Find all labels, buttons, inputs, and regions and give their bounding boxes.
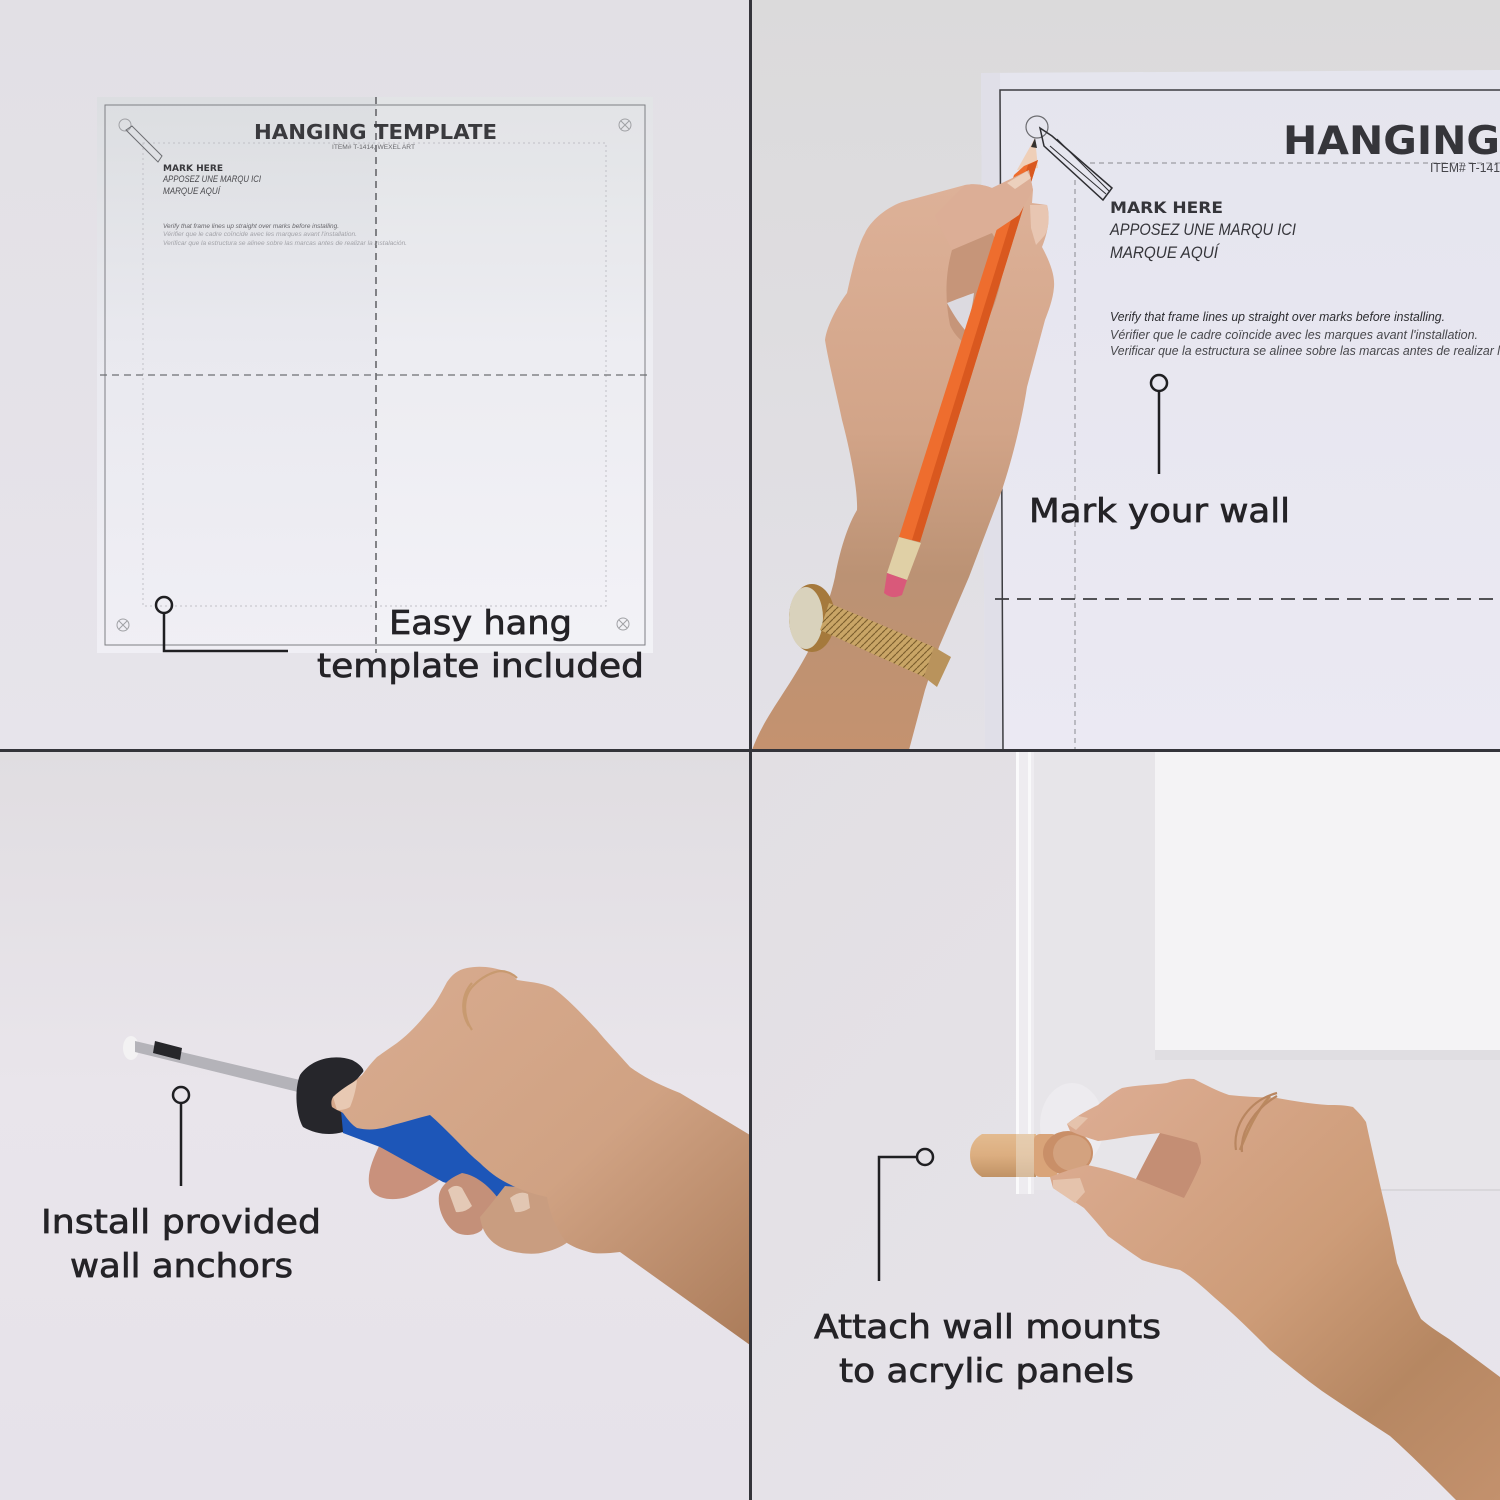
leader line: mounts	[879, 1157, 917, 1281]
template sheet	[97, 97, 653, 653]
white art print	[1155, 752, 1500, 1050]
template sheet: MARQUE AQUÍ	[163, 186, 221, 196]
panel: attach wall mounts	[750, 750, 1500, 1500]
panel: mark your wall	[750, 0, 1500, 750]
hand holding pencil	[752, 170, 1054, 750]
hand with screwdriver	[331, 967, 750, 1345]
caption: easy hang template included	[317, 603, 644, 685]
template sheet: ITEM# T-1414, WEXEL ART	[332, 144, 415, 151]
leader line: template	[164, 613, 288, 651]
leader line: mark	[1158, 391, 1160, 474]
leader dot: anchors	[173, 1087, 189, 1103]
leader dot: template	[156, 597, 172, 613]
caption: attach wall mounts to acrylic panels: to acrylic panels	[839, 1351, 1134, 1390]
suction disc	[1040, 1083, 1104, 1167]
screwdriver	[135, 1041, 530, 1197]
leader dot: mounts	[917, 1149, 933, 1165]
caption: mark your wall: Mark your wall	[1029, 491, 1290, 530]
acrylic panel	[1016, 750, 1500, 1194]
wall anchor	[123, 1036, 139, 1060]
rings	[463, 971, 517, 1030]
caption: install provided wall anchors: Install provided	[41, 1202, 321, 1241]
template sheet: MARK HERE	[163, 164, 223, 174]
template sheet: APPOSEZ UNE MARQU ICI	[162, 174, 261, 184]
caption: attach wall mounts to acrylic panels	[814, 1307, 1161, 1390]
hanging template close-up: MARK HERE	[1110, 198, 1223, 217]
leader dot: mark	[1151, 375, 1167, 391]
caption: install provided wall anchors: wall anchors	[70, 1246, 293, 1285]
hanging template close-up: HANGING	[1283, 119, 1500, 164]
hanging template close-up: Verify that frame lines up straight over marks before installing.	[1110, 310, 1445, 324]
hanging template close-up: Verificar que la estructura se alinee sobre las marcas antes de realizar l	[1110, 344, 1500, 358]
template sheet: Verificar que la estructura se alinee sobre las marcas antes de realizar la instalación.	[163, 240, 407, 247]
fingers below handle	[439, 1173, 570, 1254]
hanging template close-up: Vérifier que le cadre coïncide avec les marques avant l'installation.	[1110, 328, 1478, 342]
template sheet: Vérifier que le cadre coïncide avec les marques avant l'installation.	[163, 231, 357, 238]
hand with mount	[1050, 1079, 1500, 1500]
caption: easy hang template included: template included	[317, 646, 644, 685]
caption: install provided wall anchors	[41, 1202, 321, 1285]
caption: attach wall mounts to acrylic panels: Attach wall mounts	[814, 1307, 1161, 1346]
hanging template close-up	[981, 70, 1500, 750]
finger behind handle	[369, 1140, 445, 1199]
template sheet: HANGING TEMPLATE	[254, 120, 497, 144]
rings	[1235, 1093, 1277, 1152]
index finger over pencil	[935, 170, 1033, 250]
gold watch	[789, 584, 951, 687]
leader line: anchors	[180, 1103, 182, 1186]
caption: easy hang template included: Easy hang	[389, 603, 572, 642]
hanging template close-up: MARQUE AQUÍ	[1110, 243, 1220, 262]
hanging template close-up: APPOSEZ UNE MARQU ICI	[1109, 220, 1296, 239]
pencil	[884, 138, 1038, 597]
panel: install wall anchors	[0, 750, 750, 1500]
template sheet: Verify that frame lines up straight over marks before installing.	[163, 223, 339, 230]
panel: easy hang template	[0, 0, 750, 750]
gold standoff mount	[970, 1131, 1093, 1177]
